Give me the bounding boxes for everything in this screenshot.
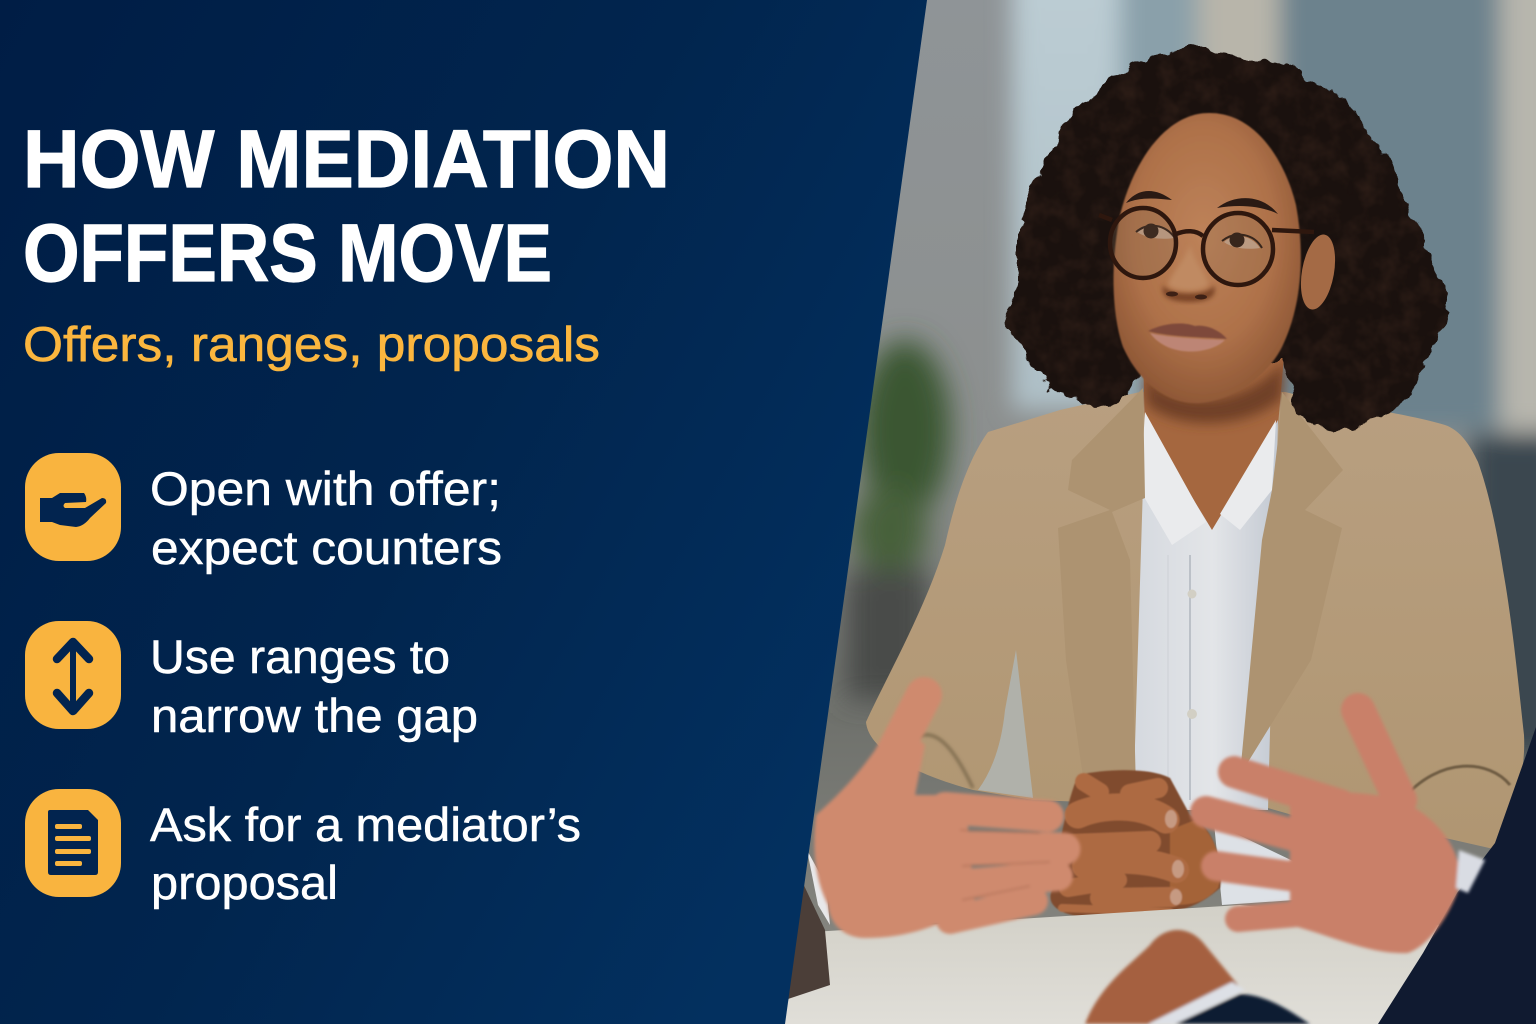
- glasses: [1099, 208, 1314, 285]
- left shirt cuff: [807, 850, 830, 925]
- item: use ranges: [25, 621, 478, 742]
- item text: Open with offer;: [150, 462, 501, 515]
- office background: [780, 0, 1536, 1024]
- item text: [150, 798, 581, 909]
- item: mediator's proposal: [25, 789, 581, 909]
- item text: narrow the gap: [151, 689, 478, 742]
- seated woman: [866, 47, 1524, 918]
- eyebrows: [1126, 191, 1278, 214]
- title: HOW MEDIATION: [23, 114, 670, 205]
- item: open with offer: [25, 453, 502, 574]
- gap between arm and body: [978, 650, 1033, 798]
- lips: [1148, 323, 1227, 352]
- item text: Use ranges to: [150, 630, 450, 683]
- table: [780, 905, 1440, 1024]
- photo: mediation meeting scene: [780, 0, 1536, 1024]
- item text: [150, 630, 478, 742]
- neck: [1144, 358, 1284, 530]
- face: [1114, 113, 1301, 403]
- icon: offering hand: [25, 453, 121, 561]
- eyes: [1136, 224, 1262, 249]
- item text: Ask for a mediator’s: [150, 798, 581, 851]
- ear: [1300, 234, 1336, 310]
- blazer: [866, 392, 1524, 850]
- shirt cuff by clasped hands: [1214, 828, 1292, 905]
- item text: expect counters: [151, 521, 502, 574]
- foreground right hand: [1206, 710, 1485, 953]
- item text: proposal: [151, 856, 338, 909]
- panel: left navy angled panel: [0, 0, 927, 1024]
- foreground left hand: [814, 695, 1064, 938]
- item text: [150, 462, 502, 574]
- shirt: [1133, 420, 1278, 810]
- blurred plant: [845, 340, 951, 700]
- title: [23, 114, 670, 299]
- foreground lower hand and sleeve: [1085, 930, 1310, 1024]
- right shirt cuff: [1456, 850, 1485, 893]
- icon: up-down arrow: [25, 621, 121, 729]
- foreground right suit sleeve: [1378, 727, 1536, 1024]
- icon: document: [25, 789, 121, 897]
- title: OFFERS MOVE: [23, 208, 552, 299]
- lapels: [1058, 388, 1145, 790]
- foreground left sleeve: [788, 886, 830, 999]
- subtitle: Offers, ranges, proposals: [23, 318, 600, 372]
- clasped hands: [1050, 770, 1221, 918]
- hair: [1003, 47, 1450, 433]
- nose: [1163, 245, 1215, 302]
